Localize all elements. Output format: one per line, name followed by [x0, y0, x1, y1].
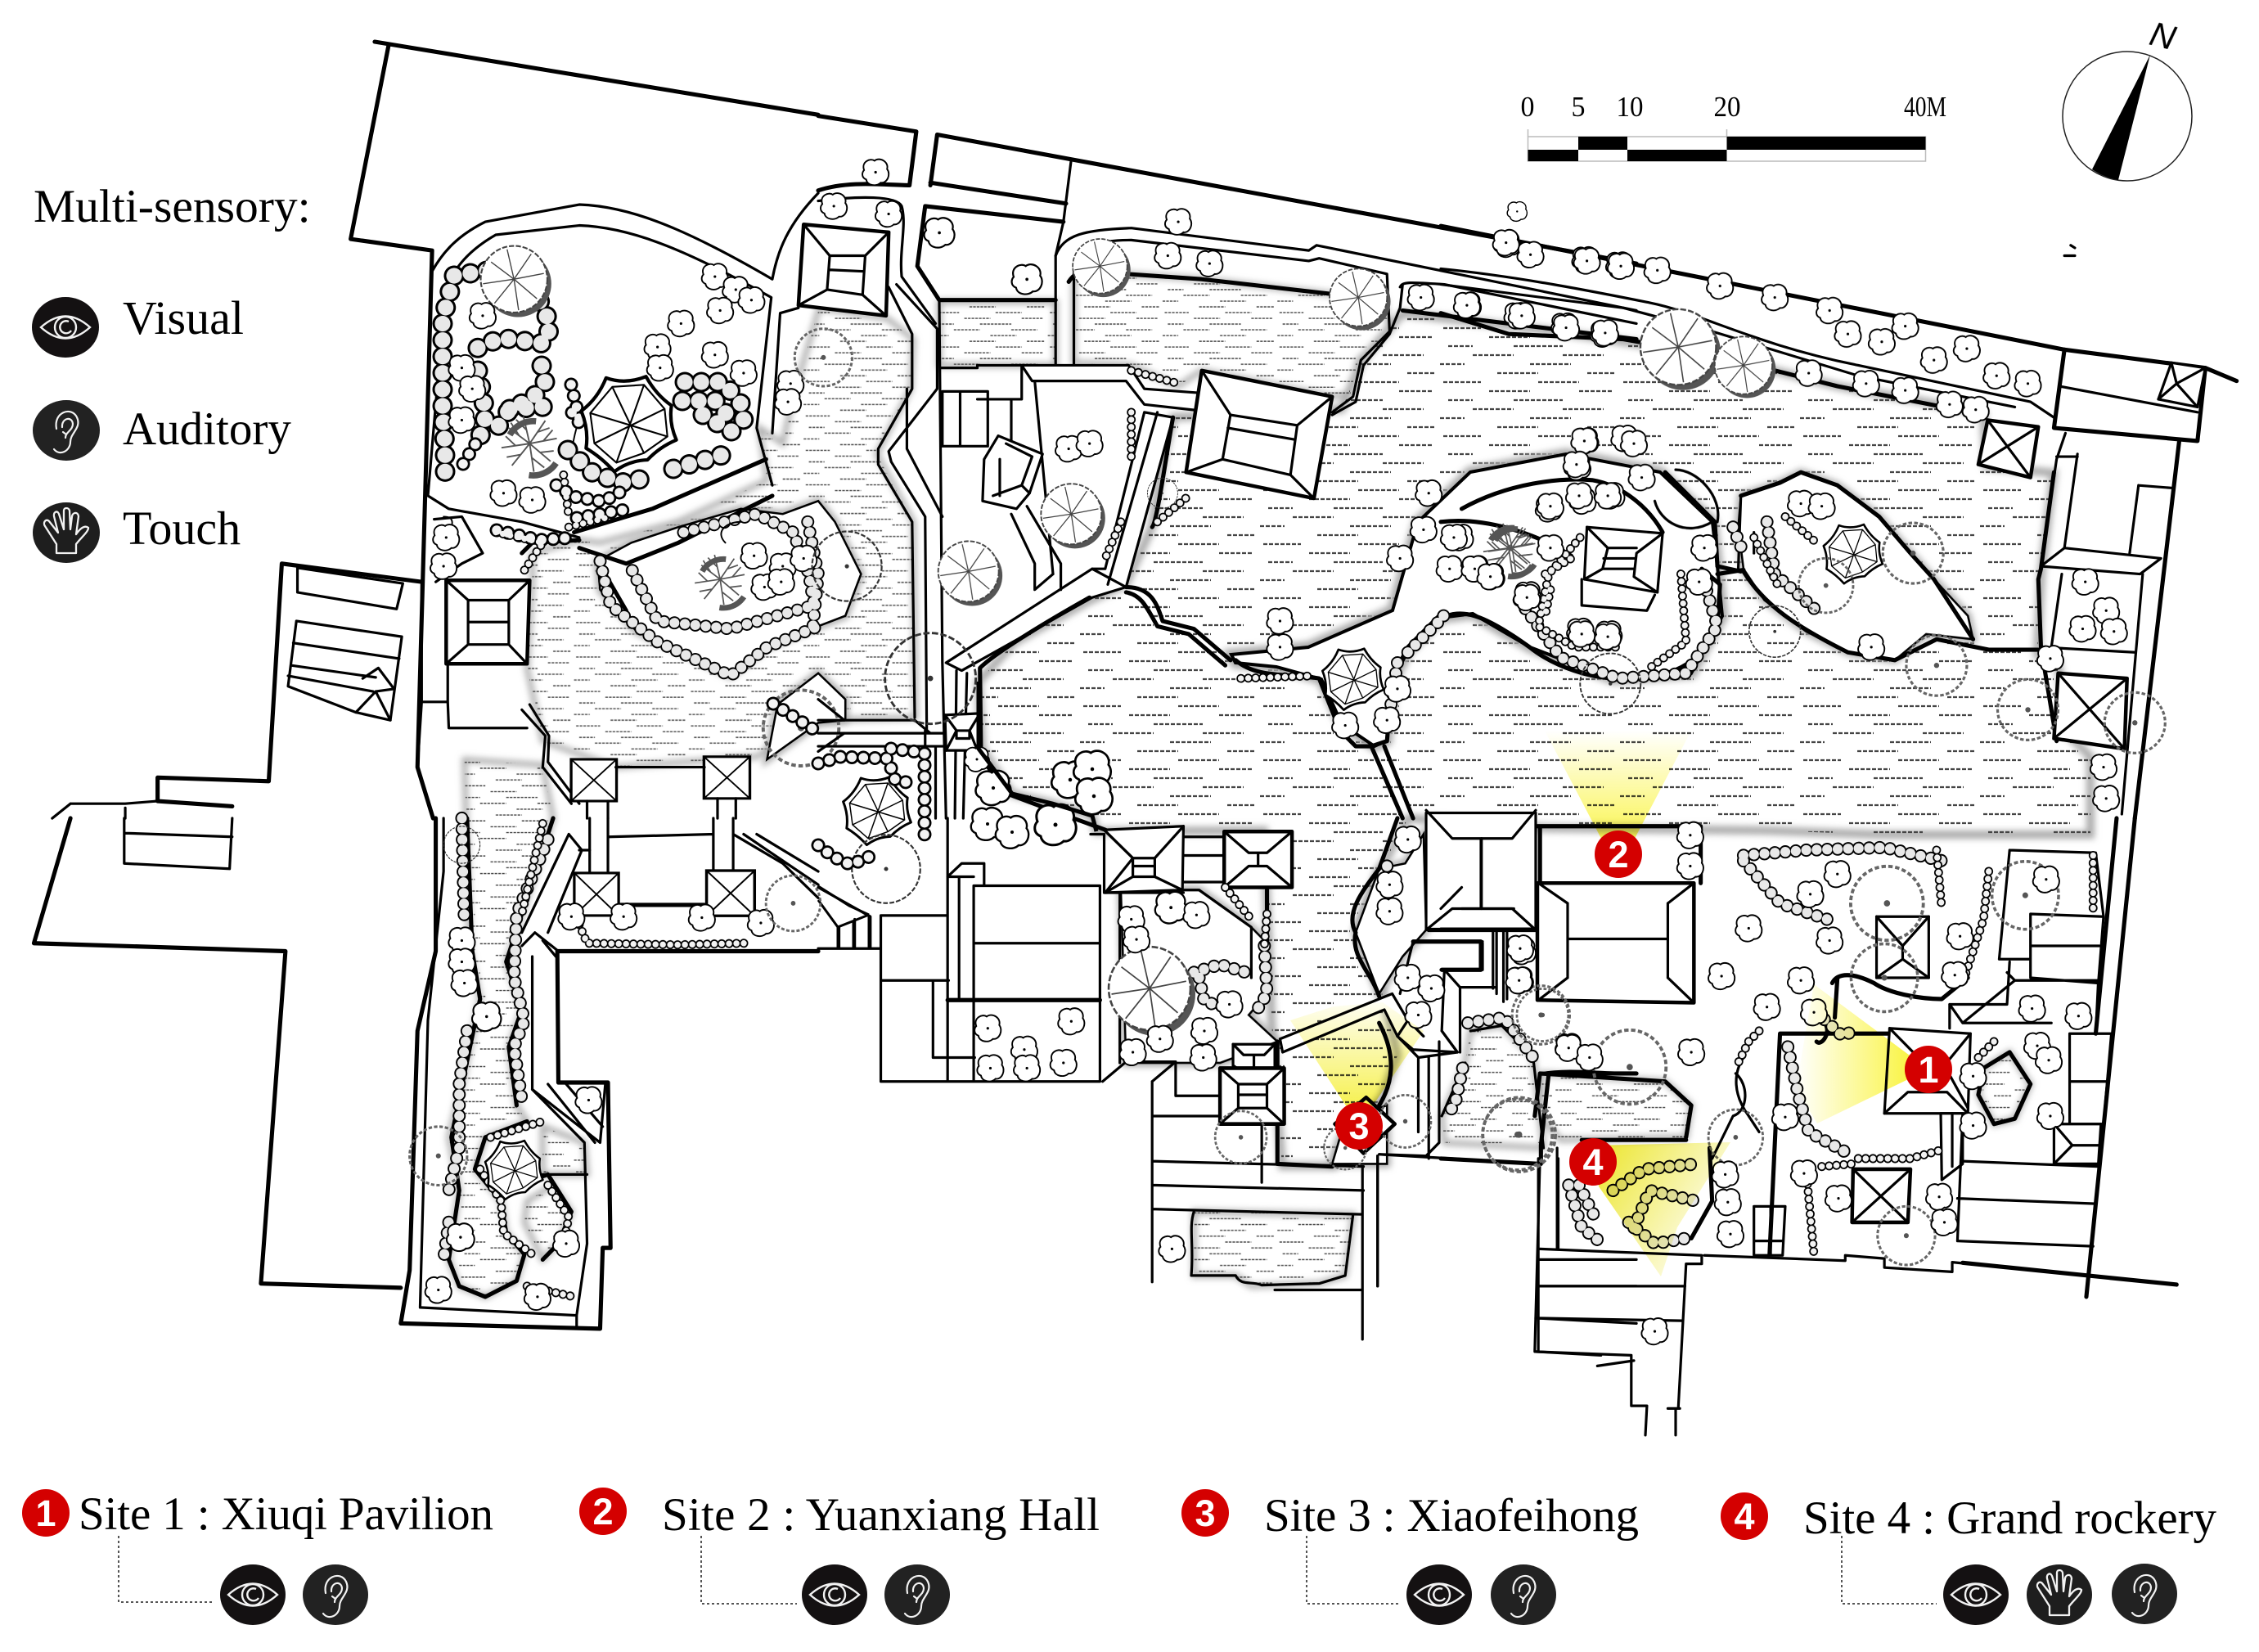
- south-east walls and buildings: [1441, 818, 2176, 1435]
- trees and shrubs, north-east: [1441, 202, 2165, 812]
- boundary walls and corridors, north-west: [52, 42, 889, 818]
- map marker 1: 1: [1918, 1049, 1939, 1091]
- site 1 row: 1: [35, 1492, 56, 1534]
- north compass: [2063, 14, 2192, 181]
- map marker 3: 3: [1348, 1105, 1370, 1147]
- scale bar: 0: [1520, 91, 1535, 123]
- site 2 row: 2: [592, 1491, 614, 1533]
- map marker 4: 4: [1582, 1141, 1604, 1183]
- scale bar: 20: [1713, 91, 1741, 123]
- map marker 1: [1905, 1046, 1952, 1093]
- scale bar: 40M: [1904, 91, 1946, 123]
- legend: auditory: [33, 400, 291, 461]
- site 3 row: Site 3 : Xiaofeihong: [1264, 1490, 1639, 1542]
- scale bar: 10: [1617, 91, 1643, 123]
- rock chains along the shores: [443, 270, 2093, 1297]
- legend: touch: Touch: [123, 502, 241, 555]
- site 4 row: Site 4 : Grand rockery: [1803, 1492, 2217, 1544]
- islands: [597, 454, 1973, 1164]
- boundary walls and corridors, central north: [818, 116, 1636, 856]
- site 3 row: [1181, 1489, 1639, 1625]
- water edge shading: [449, 272, 2090, 1297]
- boundary walls and corridors, north-east: [1441, 226, 2237, 818]
- south-central walls and buildings: [818, 810, 1636, 1355]
- legend: auditory: Auditory: [123, 403, 291, 455]
- scale bar: [1520, 91, 1946, 161]
- water surface: hatched ponds: [449, 272, 2090, 1297]
- scale bar: 5: [1571, 91, 1586, 123]
- west pavilion garden: [818, 682, 1113, 948]
- legend: visual: [32, 291, 244, 358]
- map marker 4: [1569, 1138, 1617, 1186]
- site 2 row: [579, 1488, 1100, 1625]
- site 1 row: [22, 1488, 493, 1625]
- map marker 2: [1595, 831, 1642, 878]
- sight cone: site 2: [1545, 731, 1691, 851]
- trees and shrubs, south-east: [1483, 822, 2091, 1366]
- trees and shrubs, north-west garden: [430, 246, 817, 608]
- west stream and south-west walls: [34, 818, 818, 1329]
- legend heading: Multi-sensory:: [34, 181, 311, 232]
- site 4 row: 4: [1734, 1496, 1755, 1537]
- legend: visual: Visual: [123, 291, 244, 344]
- site 2 row: Site 2 : Yuanxiang Hall: [662, 1489, 1100, 1541]
- trees and shrubs, south-central: [974, 826, 1636, 1263]
- sight cone: site 4: [1593, 1142, 1730, 1276]
- sight cone: site 1: [1796, 984, 1928, 1123]
- trees and shrubs, south-west: [410, 826, 821, 1310]
- site 3 row: 3: [1195, 1492, 1216, 1534]
- site 4 row: [1721, 1492, 2217, 1625]
- site 1 row: Site 1 : Xiuqi Pavilion: [79, 1488, 493, 1540]
- map marker 2: 2: [1608, 834, 1629, 876]
- legend: touch: [33, 502, 241, 563]
- map marker 3: [1335, 1102, 1383, 1150]
- sight cone: site 3: [1290, 1002, 1424, 1126]
- island and shore shading: [597, 454, 1973, 1164]
- trees and shrubs, central north: [794, 160, 1637, 738]
- north compass: N: [2146, 14, 2180, 57]
